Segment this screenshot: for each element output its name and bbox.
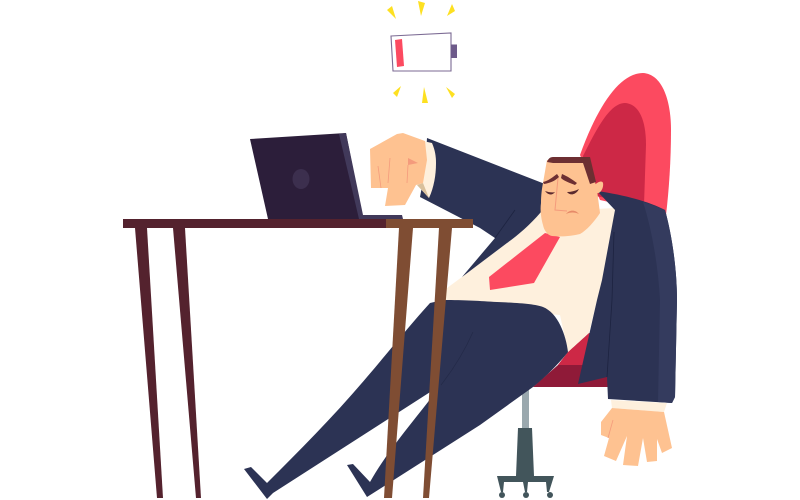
mouth xyxy=(566,211,579,214)
nose xyxy=(555,178,567,211)
chair back inner xyxy=(583,103,646,205)
hand xyxy=(370,133,427,206)
laptop logo xyxy=(292,169,310,189)
desk top dark xyxy=(123,219,386,228)
chair seat xyxy=(533,333,610,387)
head xyxy=(541,157,603,236)
cuff xyxy=(417,141,436,198)
cuff shadow xyxy=(417,183,429,198)
face xyxy=(541,157,600,236)
laptop screen xyxy=(250,133,363,219)
chair back xyxy=(580,73,671,215)
eyebrows xyxy=(543,174,577,185)
laptop xyxy=(250,133,403,219)
laptop base xyxy=(359,215,403,219)
chair seat top xyxy=(558,333,595,365)
office chair xyxy=(497,73,671,498)
trouser seam xyxy=(441,332,473,385)
raised hand and cuff xyxy=(370,133,436,206)
laptop screen edge xyxy=(339,133,363,219)
desk xyxy=(123,219,473,498)
thumb and finger lines xyxy=(378,158,418,188)
jacket right side xyxy=(578,191,677,403)
front desk legs xyxy=(384,228,413,498)
shirt xyxy=(438,208,615,352)
hanging hand xyxy=(601,408,672,466)
back desk legs xyxy=(135,228,163,498)
desk top light xyxy=(386,219,473,228)
hair xyxy=(547,157,596,184)
ear xyxy=(594,182,603,193)
sleeve crease xyxy=(495,210,515,238)
trousers and shoes xyxy=(244,300,568,499)
hanging shirt cuff xyxy=(611,400,667,412)
jacket light edge xyxy=(643,202,677,403)
raised arm sleeve xyxy=(420,138,545,277)
icon: low battery with alert rays xyxy=(387,1,457,103)
chair base xyxy=(497,428,554,498)
closed eyes xyxy=(545,189,579,195)
tie xyxy=(489,233,560,290)
jacket seam xyxy=(607,232,614,377)
chair stem xyxy=(522,388,529,429)
